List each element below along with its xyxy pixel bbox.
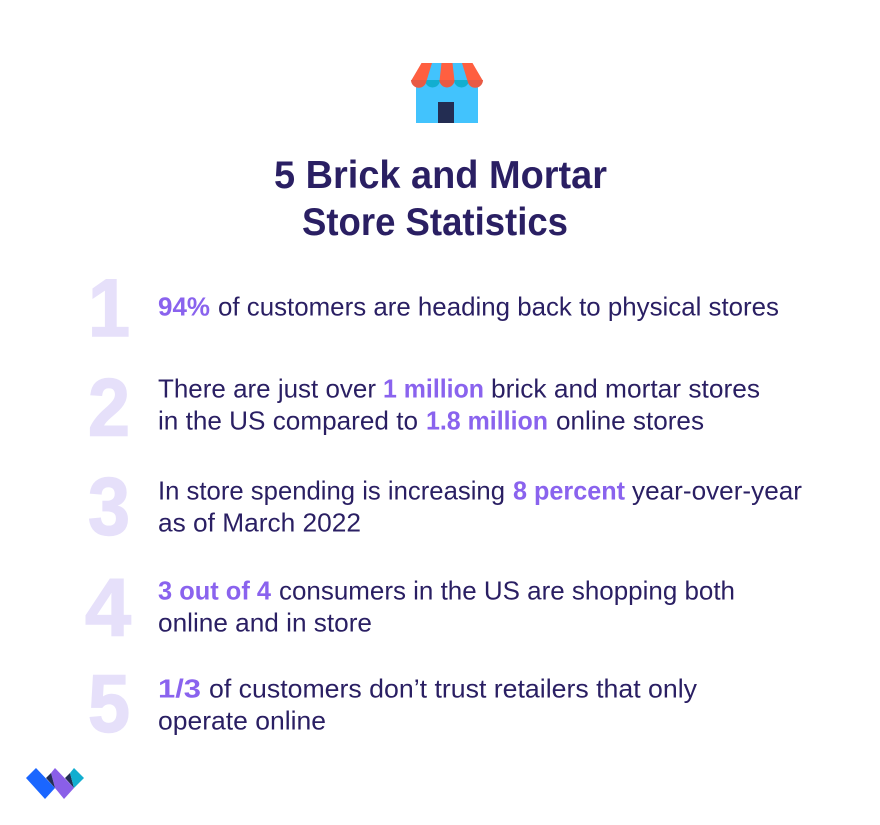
text: statistic 4: consumers in the US are shopping both	[279, 576, 735, 606]
text: statistic 1: of customers are heading back to physical stores	[218, 292, 779, 322]
text: statistic 2	[158, 374, 760, 436]
icon: logo	[26, 768, 84, 799]
title: 5 Brick and Mortar	[274, 154, 607, 197]
statistic 3	[88, 462, 802, 552]
text: statistic 4	[158, 576, 735, 638]
text: statistic 2: brick and mortar stores	[491, 374, 760, 404]
text: statistic 3: In store spending is increasing	[158, 476, 505, 506]
number 2: 2	[88, 362, 130, 454]
statistic 1	[88, 263, 779, 354]
text: statistic 2: 1.8 million	[426, 406, 548, 436]
text: statistic 4: online and in store	[158, 608, 372, 638]
text: statistic 2: online stores	[556, 406, 704, 436]
title	[274, 154, 607, 244]
icon: store	[411, 63, 483, 123]
number 5: 5	[88, 658, 130, 750]
statistic 4	[85, 562, 735, 654]
text: statistic 5: 1/3	[158, 674, 201, 704]
text: statistic 2: 1 million	[383, 374, 484, 404]
text: statistic 3: year-over-year	[632, 476, 802, 506]
statistic 2	[88, 362, 760, 454]
number 4: 4	[85, 562, 131, 654]
number 1: 1	[88, 263, 130, 354]
text: statistic 3: 8 percent	[513, 476, 625, 506]
text: statistic 5: operate online	[158, 706, 326, 736]
text: statistic 2: in the US compared to	[158, 406, 418, 436]
text: statistic 4: 3 out of 4	[158, 576, 272, 606]
statistic 5	[88, 658, 697, 750]
title: Store Statistics	[302, 201, 568, 244]
text: statistic 3	[158, 476, 802, 538]
text: statistic 5	[158, 674, 697, 736]
text: statistic 1: 94%	[158, 292, 210, 322]
text: statistic 3: as of March 2022	[158, 508, 361, 538]
number 3: 3	[88, 462, 130, 552]
text: statistic 5: of customers don’t trust retailers that only	[209, 674, 697, 704]
text: statistic 2: There are just over	[158, 374, 376, 404]
